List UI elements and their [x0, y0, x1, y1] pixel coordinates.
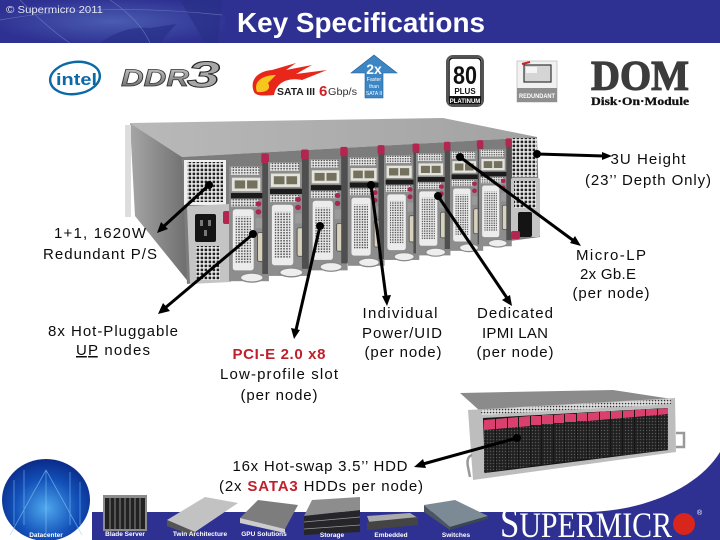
drives — [484, 408, 668, 473]
label: power/UID: Power/UID — [362, 325, 442, 342]
arrows — [157, 150, 612, 468]
vent strip — [481, 399, 671, 415]
icon: 80 Plus Platinum badge: PLATINUM — [450, 99, 480, 105]
header band — [0, 0, 720, 43]
title: Key Specifications — [237, 7, 485, 38]
icon: DDR3 logo: DDR — [121, 65, 190, 92]
label: PCI-E slot: (per node) — [240, 387, 318, 404]
icon: switches — [424, 500, 488, 539]
small server front view — [460, 390, 684, 480]
icon: DOM logo: Disk·On·Module — [591, 96, 689, 108]
arrow: 3U height — [533, 150, 612, 160]
main server chassis rear view — [125, 118, 540, 284]
icon: twin architecture: Twin Architecture — [173, 531, 227, 538]
icon: storage: Storage — [320, 532, 344, 539]
label: hot-swap HDD: (2x SATA3 HDDs per node) — [219, 478, 423, 495]
chassis side — [130, 123, 190, 284]
icon: SATA III flame logo — [253, 63, 357, 100]
icon: DOM logo: DOM — [591, 54, 689, 100]
icon: SATA III flame logo: Gbp/s — [328, 86, 357, 98]
icon: 2x faster arrow: 2x — [366, 61, 382, 77]
icon: SATA III flame logo: SATA III — [277, 86, 315, 98]
label: IPMI LAN: Dedicated — [477, 305, 553, 322]
SUPERMICRO logo: ® — [697, 509, 703, 517]
logo row — [48, 54, 689, 108]
icon: 80 Plus Platinum badge: 80 — [453, 62, 477, 90]
icon: 80 Plus Platinum badge — [447, 56, 483, 106]
icon: redundant badge — [517, 61, 557, 102]
label: Micro-LP: 2x Gb.E — [580, 266, 636, 283]
label: 3U height: 3U Height — [610, 151, 686, 168]
label: PCI-E slot — [220, 346, 339, 404]
label: power supply: 1+1, 1620W — [54, 225, 147, 242]
footer band — [2, 452, 720, 540]
icon: storage — [304, 497, 360, 539]
label: power supply — [43, 225, 157, 263]
right power supply — [511, 178, 540, 239]
icon: embedded: Embedded — [374, 532, 408, 539]
label: Micro-LP: Micro-LP — [576, 247, 646, 264]
arrow: power supply — [157, 181, 213, 233]
label: power/UID: (per node) — [364, 344, 442, 361]
icon: blade server — [103, 495, 147, 538]
drive bay — [483, 408, 668, 473]
icon: datacenter globe: Datacenter — [29, 532, 63, 539]
label: power/UID: Individual — [362, 305, 438, 322]
icon: SATA III flame logo: 6 — [319, 83, 327, 100]
arrow: IPMI LAN — [434, 192, 512, 306]
left power supply — [187, 204, 231, 284]
arrow: Micro-LP — [456, 153, 581, 246]
icon: 2x faster arrow — [351, 55, 397, 98]
right fan grille — [512, 138, 537, 177]
label: 3U height — [585, 151, 711, 189]
blue swoosh — [92, 452, 720, 540]
label: hot-pluggable nodes — [48, 323, 178, 359]
label: power supply: Redundant P/S — [43, 246, 157, 263]
arrow: power/UID — [367, 181, 391, 306]
icon: DDR3 logo — [121, 54, 220, 95]
icon: GPU solutions — [240, 500, 298, 538]
label: hot-swap HDD: 16x Hot-swap 3.5’’ HDD — [232, 458, 408, 475]
copyright: © Supermicro 2011 — [6, 4, 103, 16]
chassis front — [468, 398, 676, 480]
chassis top — [130, 118, 537, 157]
icon: blade server: Blade Server — [105, 531, 145, 538]
label: 3U height: (23’’ Depth Only) — [585, 172, 711, 189]
icon: 80 Plus Platinum badge: PLUS — [454, 87, 476, 96]
icon: intel logo: intel — [56, 70, 97, 89]
label: IPMI LAN: IPMI LAN — [482, 325, 548, 342]
arrow: hot-pluggable nodes — [158, 230, 257, 314]
icon: 2x faster arrow: SATA II — [366, 91, 382, 97]
left fan grille — [184, 160, 226, 205]
icon: intel logo — [48, 59, 102, 97]
icon: switches: Switches — [442, 532, 470, 539]
icon: embedded — [367, 513, 418, 539]
label: Micro-LP — [572, 247, 650, 302]
label: PCI-E slot: Low-profile slot — [220, 366, 339, 383]
icon: DDR3 logo: 3 — [187, 54, 220, 95]
label: hot-swap HDD — [219, 458, 423, 495]
icon: 2x faster arrow: Faster — [367, 77, 381, 83]
icon: 2x faster arrow: than — [369, 84, 379, 90]
header globe — [0, 0, 225, 43]
icon: twin architecture — [167, 497, 238, 538]
icon: GPU solutions: GPU Solutions — [241, 531, 287, 538]
label: IPMI LAN: (per node) — [476, 344, 554, 361]
label: hot-pluggable nodes: UP nodes — [76, 342, 150, 359]
compute nodes — [229, 138, 512, 282]
chassis rear face — [182, 137, 540, 284]
arrow: hot-swap HDD — [414, 434, 521, 468]
arrow: PCI-E slot — [291, 222, 324, 339]
handles — [468, 433, 684, 477]
chassis top — [460, 390, 672, 411]
label: PCI-E slot: PCI-E 2.0 x8 — [232, 346, 326, 363]
label: IPMI LAN — [476, 305, 554, 361]
icon: redundant badge: REDUNDANT — [519, 93, 555, 100]
icon: datacenter globe — [2, 459, 90, 540]
label: Micro-LP: (per node) — [572, 285, 650, 302]
label: hot-pluggable nodes: 8x Hot-Pluggable — [48, 323, 178, 340]
label: power/UID — [362, 305, 442, 361]
